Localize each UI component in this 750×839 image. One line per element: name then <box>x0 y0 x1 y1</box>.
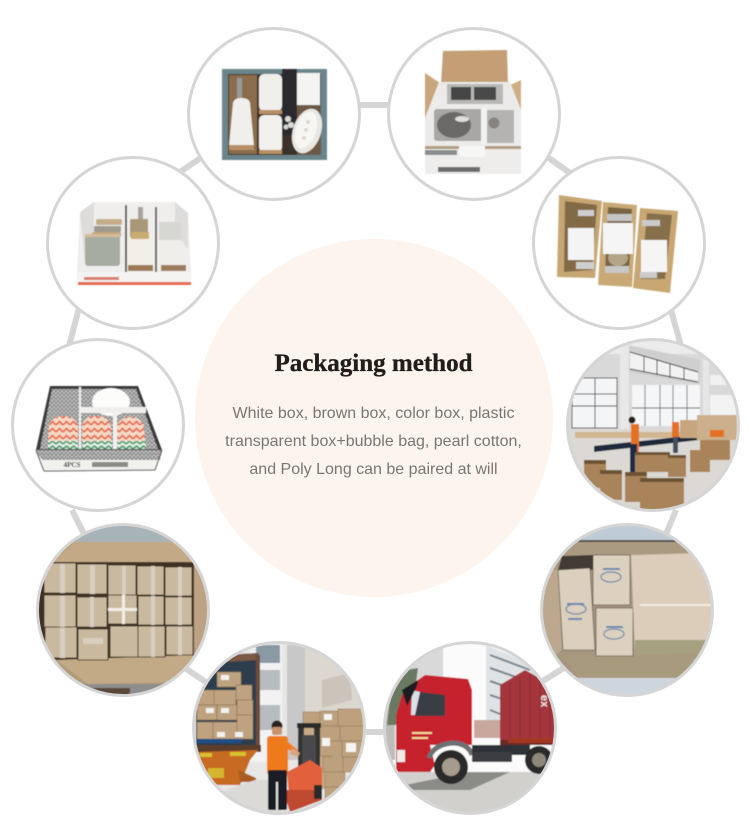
text block: packaging description: transparent box+bubble bag, pearl cotton, <box>225 433 522 450</box>
heading: Packaging method: Packaging method <box>274 350 473 377</box>
text block: packaging description: White box, brown box, color box, plastic <box>233 405 514 422</box>
text block: packaging description: and Poly Long can be paired at will <box>249 461 498 478</box>
panel: central peach circle <box>195 239 553 597</box>
text block: packaging description <box>225 405 522 478</box>
photo circle: carton with branded boxes <box>540 522 715 700</box>
photo circle: foam packed set in carton <box>388 28 560 200</box>
photo circle: carton with fifteen taped boxes <box>36 522 210 698</box>
photo circle: transparent box with zigzag set: 4PCS <box>64 461 80 469</box>
photo circle: display tray with bath sets <box>48 158 218 328</box>
photo circle: boxed white bath set <box>188 28 360 200</box>
photo circle: red truck with container <box>383 641 558 818</box>
connector lines between circles <box>69 105 681 732</box>
photo circle: brown boxes from above <box>534 158 704 328</box>
photo circle: transparent box with zigzag set <box>12 340 184 510</box>
photo circle: red truck with container: ex <box>538 695 550 708</box>
photo circle: factory packing floor <box>566 338 740 514</box>
photo circle: forklift loading container <box>192 640 370 820</box>
